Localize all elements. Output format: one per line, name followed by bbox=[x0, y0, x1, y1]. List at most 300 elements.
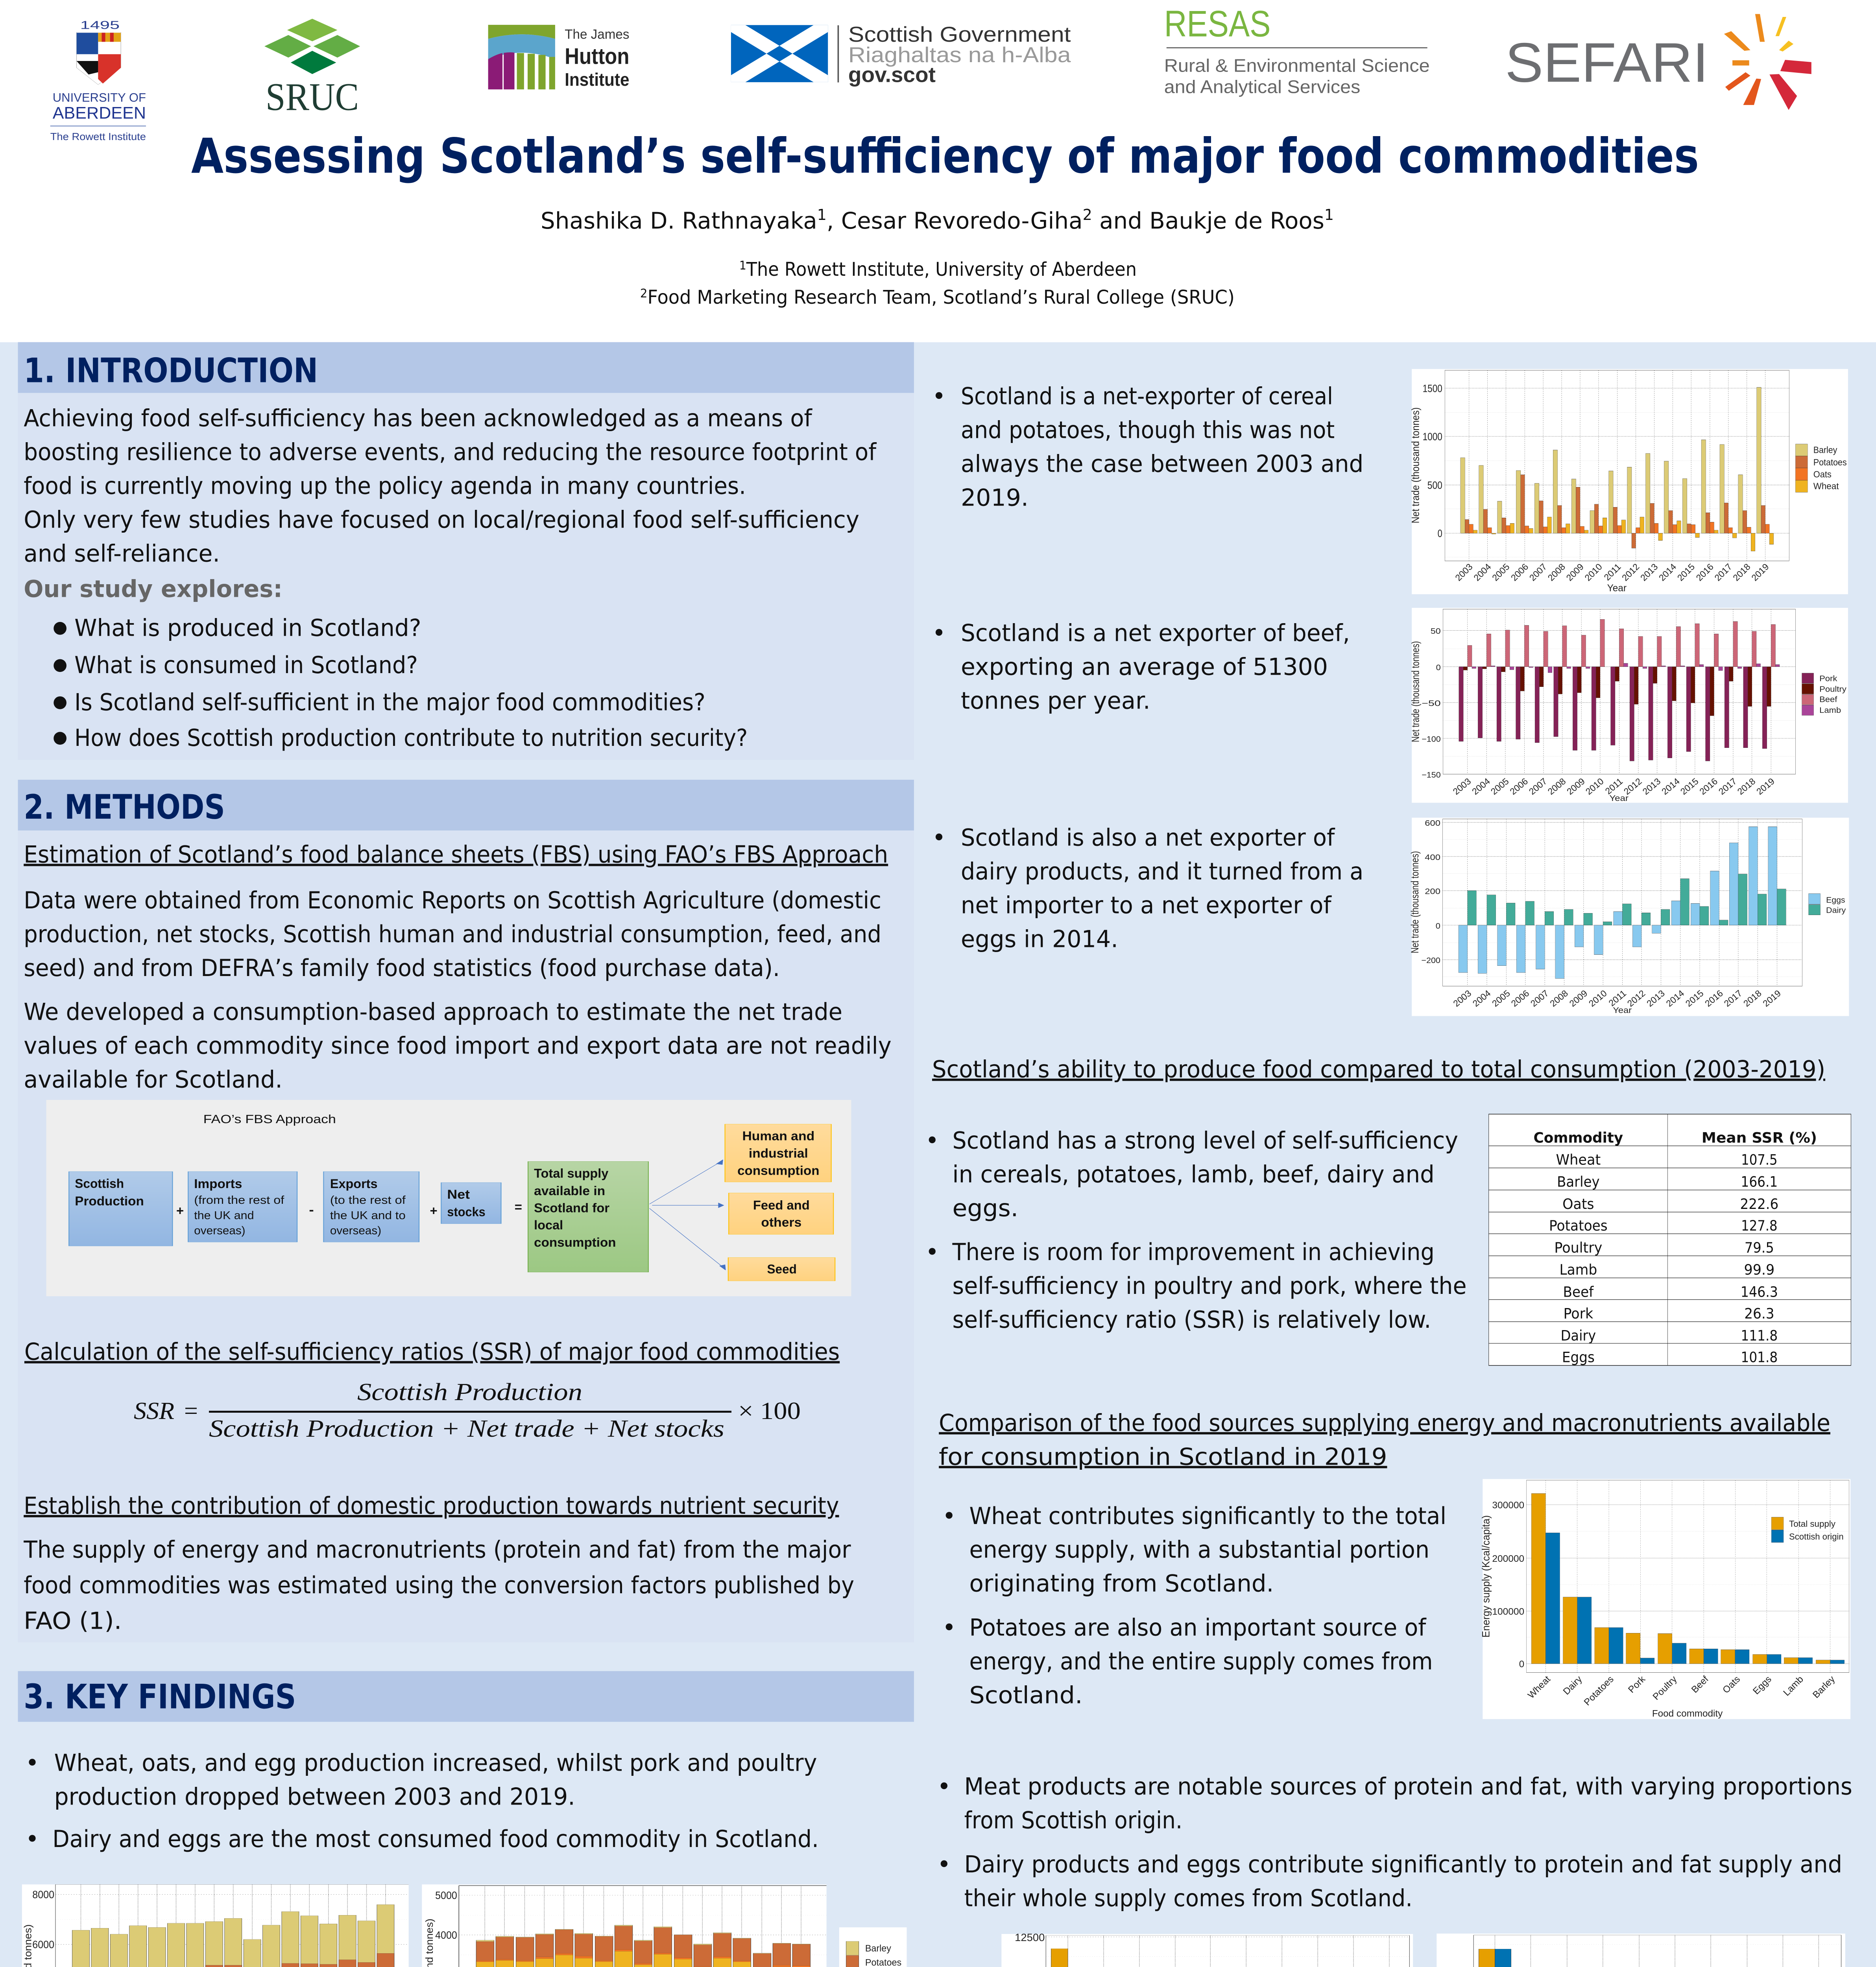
legend: Potatoes bbox=[1813, 458, 1847, 468]
text: wheat and potatoes energy: energy, and the entire supply comes from bbox=[969, 1648, 1433, 1675]
text: SSR findings: self-sufficiency in poultry and pork, where the bbox=[953, 1272, 1467, 1299]
text: nutrient supply: The supply of energy and macronutrients (protein and fat) from the major bbox=[23, 1536, 851, 1563]
box: feed and others: others bbox=[761, 1215, 801, 1229]
bars bbox=[1459, 619, 1780, 761]
table text: Wheat bbox=[1556, 1152, 1601, 1168]
x axis labels: Barley bbox=[1811, 1674, 1837, 1700]
heading: key findings: 3. KEY FINDINGS bbox=[24, 1677, 296, 1716]
table: mean self-sufficiency ratio bbox=[1489, 1114, 1851, 1366]
logos: Institute bbox=[565, 70, 629, 90]
box: exports: Exports bbox=[330, 1177, 378, 1191]
x axis labels: 2018 bbox=[1741, 988, 1763, 1009]
table text: Commodity bbox=[1534, 1129, 1623, 1146]
text: data sources: seed) and from DEFRA’s family food statistics (food purchase data). bbox=[24, 954, 780, 982]
arrows bbox=[650, 1160, 726, 1270]
flow diagram: FAO FBS approach: stocks bbox=[447, 1205, 486, 1219]
text: SSR findings: • bbox=[925, 1127, 939, 1154]
y axis labels bbox=[1423, 383, 1442, 540]
chart: consumption stacked bars: 4000 bbox=[435, 1929, 457, 1941]
table text: 101.8 bbox=[1741, 1349, 1778, 1366]
table text: Potatoes bbox=[1549, 1218, 1608, 1234]
table text: Eggs bbox=[1562, 1349, 1595, 1366]
operators: + bbox=[176, 1203, 184, 1218]
x axis labels: Oats bbox=[1721, 1674, 1742, 1696]
legend bbox=[1771, 1517, 1844, 1543]
SSR formula: = bbox=[184, 1398, 198, 1425]
y axis labels bbox=[435, 1890, 457, 1967]
text: SSR findings: self-sufficiency ratio (SSR) is relatively low. bbox=[953, 1306, 1431, 1333]
text: meat and dairy macronutrients: • bbox=[937, 1773, 951, 1800]
list: study questions: How does Scottish production contribute to nutrition security? bbox=[74, 724, 748, 751]
logos: RESAS bbox=[1164, 3, 1270, 44]
flow diagram: FAO FBS approach: overseas) bbox=[330, 1224, 381, 1237]
x axis labels: 2012 bbox=[1620, 561, 1642, 583]
x axis labels: 2011 bbox=[1606, 988, 1628, 1008]
text: production trends: • bbox=[25, 1749, 39, 1776]
list: study questions: Is Scotland self-sufficient in the major food commodities? bbox=[74, 689, 705, 716]
table text: 107.5 bbox=[1741, 1152, 1778, 1168]
logos: gov.scot bbox=[848, 63, 936, 87]
x axis labels: Eggs bbox=[1751, 1674, 1774, 1697]
text: dairy finding: dairy products, and it turned from a bbox=[961, 858, 1363, 885]
x axis labels: 2017 bbox=[1717, 776, 1739, 797]
text: SSR findings: in cereals, potatoes, lamb, beef, dairy and bbox=[953, 1161, 1435, 1188]
chart: protein supply: 12500 bbox=[1015, 1932, 1045, 1943]
text: wheat and potatoes energy: originating from Scotland. bbox=[969, 1570, 1274, 1597]
x axis labels: Pork bbox=[1626, 1674, 1648, 1695]
logo: James Hutton Institute bbox=[488, 25, 629, 90]
text: cereals finding: and potatoes, though this was not bbox=[961, 417, 1335, 444]
text: beef finding: tonnes per year. bbox=[961, 687, 1150, 714]
y axis labels: 0 bbox=[1436, 663, 1441, 672]
legend: Total supply bbox=[1789, 1519, 1835, 1529]
x axis labels: 2010 bbox=[1584, 776, 1606, 797]
affiliation 2: Food Marketing Research Team, Scotland’s Rural College (SRUC) bbox=[647, 286, 1235, 308]
text: dairy finding: • bbox=[932, 824, 946, 851]
chart: production stacked bars bbox=[22, 1884, 409, 1967]
x axis labels: Beef bbox=[1690, 1674, 1711, 1695]
text: SSR findings: Scotland has a strong level of self-sufficiency bbox=[953, 1127, 1458, 1154]
y axis labels: 50 bbox=[1431, 627, 1441, 636]
subheading: food sources comparison bbox=[939, 1409, 1830, 1470]
table text: 222.6 bbox=[1740, 1196, 1778, 1212]
table text: 111.8 bbox=[1741, 1327, 1778, 1344]
x axis labels: 2011 bbox=[1603, 776, 1625, 796]
heading: key findings bbox=[18, 1671, 914, 1722]
table text: 79.5 bbox=[1745, 1240, 1774, 1257]
x axis labels: Potatoes bbox=[1582, 1674, 1616, 1708]
box: total supply: local bbox=[534, 1218, 563, 1232]
bars bbox=[1461, 387, 1774, 551]
text: SSR findings: There is room for improvement in achieving bbox=[952, 1238, 1435, 1266]
table text: 146.3 bbox=[1741, 1284, 1778, 1301]
table text: Barley bbox=[1557, 1174, 1600, 1190]
subheading: ability to produce food: Scotland’s ability to produce food compared to total consumption (2003-2019) bbox=[932, 1056, 1825, 1083]
chart: net trade cereals and potatoes: Year bbox=[1607, 582, 1627, 593]
text: data sources: Data were obtained from Economic Reports on Scottish Agriculture (domestic bbox=[24, 887, 881, 914]
logos: ABERDEEN bbox=[53, 103, 146, 122]
y axis labels: 1000 bbox=[1423, 431, 1442, 443]
y axis labels: −50 bbox=[1422, 699, 1441, 708]
SSR formula: Scottish Production + Net trade + Net stocks bbox=[209, 1415, 724, 1442]
x axis labels: 2007 bbox=[1529, 988, 1551, 1009]
logo: SEFARI bbox=[1505, 14, 1811, 110]
x axis labels: 2009 bbox=[1565, 776, 1587, 797]
series bbox=[476, 1925, 811, 1967]
authors: Shashika D. Rathnayaka bbox=[541, 207, 818, 234]
chart: consumption stacked bars: 5000 bbox=[435, 1890, 457, 1901]
SSR formula: SSR bbox=[134, 1398, 174, 1425]
flow diagram: FAO FBS approach: Production bbox=[75, 1194, 144, 1208]
flow diagram: FAO FBS approach: Scotland for bbox=[534, 1201, 609, 1215]
table text bbox=[1534, 1129, 1817, 1366]
flow diagram: FAO FBS approach: available in bbox=[534, 1184, 605, 1198]
chart: net trade eggs and dairy bbox=[1409, 818, 1849, 1016]
panel: introduction bbox=[18, 342, 914, 760]
logos: 1495 bbox=[80, 19, 120, 31]
text: introduction paragraph: and self-reliance. bbox=[24, 540, 220, 567]
x axis labels: Poultry bbox=[1651, 1674, 1679, 1702]
logos: SRUC bbox=[266, 75, 359, 118]
y axis labels: −100 bbox=[1422, 734, 1441, 744]
text: meat and dairy macronutrients: their whole supply comes from Scotland. bbox=[964, 1884, 1413, 1912]
x axis labels: 2013 bbox=[1645, 988, 1667, 1009]
authors: 2 bbox=[1083, 206, 1092, 223]
list: study questions: What is produced in Scotland? bbox=[74, 614, 421, 642]
table text: 127.8 bbox=[1741, 1218, 1778, 1234]
chart: net trade meat bbox=[1410, 608, 1848, 803]
heading: methods: 2. METHODS bbox=[24, 788, 225, 827]
heading: introduction: 1. INTRODUCTION bbox=[24, 351, 318, 391]
text: meat and dairy macronutrients: Meat products are notable sources of protein and fat, with varying proportions bbox=[964, 1773, 1852, 1800]
legend: Beef bbox=[1819, 695, 1838, 704]
flow diagram: FAO FBS approach: (to the rest of bbox=[330, 1194, 406, 1206]
text: nutrient supply: food commodities was estimated using the conversion factors published by bbox=[24, 1572, 854, 1599]
authors: , Cesar Revoredo-Giha bbox=[827, 207, 1083, 234]
text: cereals finding: • bbox=[932, 383, 946, 410]
x axis labels: 2008 bbox=[1548, 988, 1570, 1009]
box: net stocks bbox=[441, 1183, 501, 1224]
logo: RESAS bbox=[1164, 3, 1430, 97]
text: wheat and potatoes energy: • bbox=[942, 1502, 956, 1530]
text: meat and dairy macronutrients: from Scottish origin. bbox=[964, 1807, 1182, 1834]
text: wheat and potatoes energy: Wheat contributes significantly to the total bbox=[969, 1502, 1446, 1530]
legend: Poultry bbox=[1819, 685, 1847, 694]
flow diagram: FAO FBS approach: Total supply bbox=[534, 1166, 608, 1180]
legend: Wheat bbox=[1813, 482, 1839, 491]
chart: energy supply: Food commodity bbox=[1652, 1708, 1723, 1719]
heading: methods bbox=[18, 780, 914, 830]
logo: University of Aberdeen bbox=[50, 19, 146, 142]
y axis labels bbox=[1421, 819, 1440, 965]
x axis labels: 2005 bbox=[1490, 561, 1512, 583]
subheading: food sources comparison: Comparison of the food sources supplying energy and macronutrients available bbox=[939, 1409, 1830, 1436]
table text: 99.9 bbox=[1744, 1262, 1774, 1279]
text: consumption-based approach: We developed a consumption-based approach to estimate the net trade bbox=[24, 998, 842, 1026]
y axis labels: −150 bbox=[1422, 770, 1441, 779]
legend: Barley bbox=[1813, 445, 1837, 455]
right column text bbox=[925, 383, 1852, 1912]
x axis labels bbox=[1451, 988, 1783, 1009]
text: wheat and potatoes energy: energy supply, with a substantial portion bbox=[969, 1536, 1429, 1563]
flow diagram: FAO FBS approach: the UK and to bbox=[330, 1209, 406, 1222]
logos: Riaghaltas na h-Alba bbox=[848, 43, 1071, 67]
x axis labels: 2009 bbox=[1564, 561, 1586, 583]
heading: introduction bbox=[18, 342, 914, 393]
text: meat and dairy macronutrients: • bbox=[937, 1851, 951, 1878]
affiliation 1: The Rowett Institute, University of Aberdeen bbox=[746, 258, 1137, 280]
box: imports: overseas) bbox=[194, 1224, 246, 1237]
chart: energy supply: Energy supply (Kcal/capita) bbox=[1480, 1515, 1492, 1638]
x axis labels: 2016 bbox=[1703, 988, 1725, 1009]
x axis labels: 2003 bbox=[1451, 776, 1473, 797]
logo: Scottish Government bbox=[731, 22, 1071, 87]
legend: Dairy bbox=[1826, 906, 1846, 915]
chart: net trade cereals and potatoes bbox=[1410, 369, 1848, 594]
x axis labels: 2008 bbox=[1545, 776, 1568, 797]
table text: 26.3 bbox=[1744, 1305, 1774, 1322]
flow diagram: FAO FBS approach: (from the rest of bbox=[194, 1194, 284, 1206]
box: Scottish production bbox=[69, 1172, 172, 1246]
flow diagram: FAO FBS approach: FAO’s FBS Approach bbox=[203, 1113, 336, 1126]
affiliation 2: 2 bbox=[640, 287, 647, 301]
text: nutrient supply: FAO (1). bbox=[24, 1607, 122, 1634]
x axis labels: 2013 bbox=[1638, 561, 1660, 583]
text: dairy finding: net importer to a net exporter of bbox=[961, 892, 1332, 919]
table text: Mean SSR (%) bbox=[1702, 1129, 1817, 1146]
text: beef finding: Scotland is a net exporter of beef, bbox=[961, 619, 1350, 646]
text: introduction paragraph: boosting resilience to adverse events, and reducing the resource footprint of bbox=[24, 438, 877, 465]
panel: methods bbox=[18, 780, 914, 1642]
x axis labels bbox=[1453, 561, 1771, 583]
table text: Poultry bbox=[1554, 1240, 1602, 1257]
text: beef finding bbox=[932, 619, 1350, 714]
text: SSR findings bbox=[925, 1127, 1467, 1333]
logos: The James bbox=[565, 27, 629, 42]
logo: SRUC bbox=[264, 19, 360, 118]
logos: UNIVERSITY OF bbox=[53, 90, 146, 104]
affiliation 1: 1 bbox=[739, 259, 746, 273]
chart: net trade meat: Net trade (thousand tonnes) bbox=[1410, 641, 1422, 742]
text: Feed and bbox=[753, 1198, 810, 1212]
text: meat and dairy macronutrients bbox=[937, 1773, 1852, 1912]
x axis labels: 2007 bbox=[1527, 776, 1549, 797]
operators: + bbox=[430, 1203, 438, 1218]
text: production trends: Dairy and eggs are the most consumed food commodity in Scotland. bbox=[52, 1825, 819, 1853]
flow diagram: FAO FBS approach: consumption bbox=[534, 1235, 616, 1249]
x axis labels: 2014 bbox=[1657, 561, 1678, 583]
text: consumption bbox=[737, 1163, 820, 1177]
x axis labels: 2017 bbox=[1722, 988, 1744, 1009]
box: exports bbox=[323, 1172, 419, 1242]
x axis labels: 2019 bbox=[1749, 561, 1771, 583]
legend: Oats bbox=[1813, 470, 1832, 480]
chart: production stacked bars: 6000 bbox=[32, 1939, 54, 1950]
y axis labels bbox=[1492, 1500, 1524, 1670]
y axis labels: 0 bbox=[1519, 1659, 1524, 1670]
chart: net trade meat: Year bbox=[1609, 794, 1629, 803]
legend bbox=[1795, 444, 1847, 492]
y axis labels: −200 bbox=[1421, 956, 1440, 965]
box: total supply bbox=[528, 1161, 648, 1272]
text: beef finding: exporting an average of 51300 bbox=[961, 653, 1328, 680]
x axis labels: 2018 bbox=[1731, 561, 1752, 583]
y axis labels bbox=[32, 1889, 54, 1967]
text: SSR findings: • bbox=[925, 1238, 939, 1266]
x axis labels: 2016 bbox=[1697, 776, 1719, 797]
text: consumption-based approach: available for Scotland. bbox=[24, 1066, 283, 1093]
header band bbox=[0, 0, 1876, 342]
box: seed: Seed bbox=[767, 1262, 797, 1276]
list: study questions: What is consumed in Scotland? bbox=[74, 651, 418, 679]
x axis labels: 2006 bbox=[1508, 776, 1530, 797]
series bbox=[72, 1904, 394, 1967]
x axis labels: 2012 bbox=[1625, 988, 1647, 1009]
x axis labels: Dairy bbox=[1561, 1674, 1584, 1697]
flow diagram: FAO FBS approach: industrial bbox=[749, 1146, 808, 1160]
authors: and Baukje de Roos bbox=[1092, 207, 1324, 234]
x axis labels: 2015 bbox=[1678, 776, 1701, 797]
box: human and industrial consumption bbox=[725, 1124, 831, 1182]
x axis labels: 2016 bbox=[1694, 561, 1715, 583]
text: introduction paragraph: Only very few studies have focused on local/regional food self-sufficiency bbox=[24, 506, 859, 533]
y axis labels: 600 bbox=[1425, 819, 1440, 828]
x axis labels: 2019 bbox=[1754, 776, 1776, 797]
x axis labels bbox=[1451, 776, 1776, 797]
chart: energy supply bbox=[1480, 1479, 1850, 1719]
y axis labels: 200000 bbox=[1492, 1554, 1524, 1564]
x axis labels: 2003 bbox=[1453, 561, 1475, 583]
table text: Pork bbox=[1564, 1305, 1593, 1322]
chart: fat supply bbox=[1436, 1934, 1845, 1967]
x axis labels: 2006 bbox=[1509, 561, 1530, 583]
text: data sources: production, net stocks, Scottish human and industrial consumption, feed, and bbox=[24, 921, 881, 948]
legend: Eggs bbox=[1826, 895, 1845, 904]
text: production trends: Wheat, oats, and egg production increased, whilst pork and poultry bbox=[54, 1749, 817, 1776]
x axis labels: Lamb bbox=[1781, 1674, 1806, 1698]
x axis labels: 2006 bbox=[1509, 988, 1531, 1009]
subheading: FBS estimation: Estimation of Scotland’s food balance sheets (FBS) using FAO’s FBS Approach bbox=[24, 841, 888, 868]
text: wheat and potatoes energy: • bbox=[942, 1614, 956, 1641]
text: cereals finding: Scotland is a net-exporter of cereal bbox=[961, 383, 1333, 410]
box: Scottish production: Scottish bbox=[75, 1176, 124, 1190]
x axis labels: Wheat bbox=[1526, 1674, 1553, 1701]
legend bbox=[1809, 894, 1846, 915]
title: Assessing Scotland’s self-sufficiency of major food commodities bbox=[191, 128, 1699, 184]
y axis labels bbox=[1422, 627, 1441, 779]
box: feed and others bbox=[729, 1193, 833, 1234]
x axis labels: 2004 bbox=[1472, 561, 1493, 583]
SSR formula: × 100 bbox=[738, 1398, 801, 1425]
legend: Pork bbox=[1819, 674, 1837, 683]
x axis labels: 2014 bbox=[1660, 776, 1682, 797]
text: introduction paragraph bbox=[24, 404, 877, 567]
y axis labels: 500 bbox=[1427, 480, 1442, 491]
x axis labels: 2005 bbox=[1490, 988, 1512, 1009]
SSR formula bbox=[134, 1379, 801, 1442]
bars bbox=[1459, 827, 1786, 978]
text: data sources bbox=[24, 887, 881, 982]
x axis labels: 2012 bbox=[1622, 776, 1644, 797]
chart: net trade eggs and dairy: Year bbox=[1613, 1006, 1632, 1015]
text: introduction paragraph: Achieving food self-sufficiency has been acknowledged as a means of bbox=[24, 404, 813, 432]
text: beef finding: • bbox=[932, 619, 946, 646]
table text: Lamb bbox=[1559, 1262, 1597, 1279]
bars bbox=[1479, 1949, 1835, 1967]
text: production trends bbox=[25, 1749, 819, 1853]
text: cereals finding: always the case between 2003 and bbox=[961, 450, 1363, 478]
y axis labels: 100000 bbox=[1492, 1606, 1524, 1617]
authors: 1 bbox=[817, 206, 827, 223]
legend: stacked bars: Barley bbox=[865, 1943, 891, 1954]
operators: - bbox=[309, 1203, 314, 1217]
x axis labels: 2011 bbox=[1602, 561, 1623, 583]
chart: consumption stacked bars bbox=[422, 1884, 827, 1967]
x axis labels: 2015 bbox=[1675, 561, 1697, 583]
text: wheat and potatoes energy: Potatoes are also an important source of bbox=[969, 1614, 1427, 1641]
x axis labels: 2017 bbox=[1712, 561, 1734, 583]
y axis labels: 0 bbox=[1436, 921, 1440, 930]
legend: Lamb bbox=[1819, 706, 1841, 714]
logos bbox=[50, 3, 1811, 142]
table text: Beef bbox=[1563, 1284, 1594, 1301]
table text: Oats bbox=[1562, 1196, 1594, 1212]
x axis labels: 2015 bbox=[1684, 988, 1706, 1009]
subheading: food sources comparison: for consumption in Scotland in 2019 bbox=[939, 1443, 1387, 1470]
x axis labels: 2010 bbox=[1582, 561, 1604, 583]
x axis labels: 2003 bbox=[1451, 988, 1473, 1009]
x axis labels: 2019 bbox=[1761, 988, 1783, 1009]
section: key findings bbox=[18, 1671, 914, 1853]
y axis labels: 200 bbox=[1425, 887, 1440, 896]
flow diagram: FAO FBS approach bbox=[46, 1100, 851, 1296]
x axis labels: 2008 bbox=[1546, 561, 1567, 583]
x axis labels: 2005 bbox=[1489, 776, 1511, 797]
x axis labels: 2013 bbox=[1640, 776, 1662, 797]
list: study questions bbox=[54, 614, 748, 751]
chart: net trade eggs and dairy: Net trade (thousand tonnes) bbox=[1409, 851, 1421, 953]
text: SSR findings: eggs. bbox=[953, 1194, 1018, 1222]
logos: The Rowett Institute bbox=[50, 131, 146, 142]
text: meat and dairy macronutrients: Dairy products and eggs contribute significantly to protein and fat supply and bbox=[964, 1851, 1842, 1878]
box: imports bbox=[188, 1172, 297, 1242]
y axis labels: 0 bbox=[1438, 528, 1442, 540]
text: consumption-based approach bbox=[24, 998, 892, 1093]
y axis labels: 300000 bbox=[1492, 1500, 1524, 1511]
box: net stocks: Net bbox=[447, 1187, 470, 1201]
flow diagram: FAO FBS approach: = bbox=[515, 1200, 522, 1214]
text: cereals finding bbox=[932, 383, 1363, 511]
box: imports: the UK and bbox=[194, 1209, 254, 1222]
bars bbox=[1051, 1949, 1405, 1967]
table text: Dairy bbox=[1561, 1327, 1596, 1344]
text: wheat and potatoes energy: Scotland. bbox=[969, 1681, 1083, 1709]
logos: Hutton bbox=[565, 44, 629, 69]
bars bbox=[1531, 1493, 1845, 1664]
box: imports: Imports bbox=[194, 1177, 242, 1191]
text: dairy finding bbox=[932, 824, 1363, 953]
table text: 166.1 bbox=[1741, 1174, 1778, 1190]
subheading: nutrient security: Establish the contribution of domestic production towards nutrient security bbox=[24, 1492, 839, 1519]
operators bbox=[176, 1200, 522, 1218]
x axis labels: 2004 bbox=[1470, 776, 1492, 797]
x axis labels bbox=[1526, 1674, 1837, 1708]
box: seed bbox=[728, 1258, 835, 1281]
x axis labels: 2007 bbox=[1527, 561, 1549, 583]
text: consumption-based approach: values of each commodity since food import and export data are not readily bbox=[24, 1032, 892, 1059]
text: dairy finding: eggs in 2014. bbox=[961, 926, 1118, 953]
subheading: SSR calculation: Calculation of the self-sufficiency ratios (SSR) of major food commodities bbox=[24, 1338, 840, 1365]
